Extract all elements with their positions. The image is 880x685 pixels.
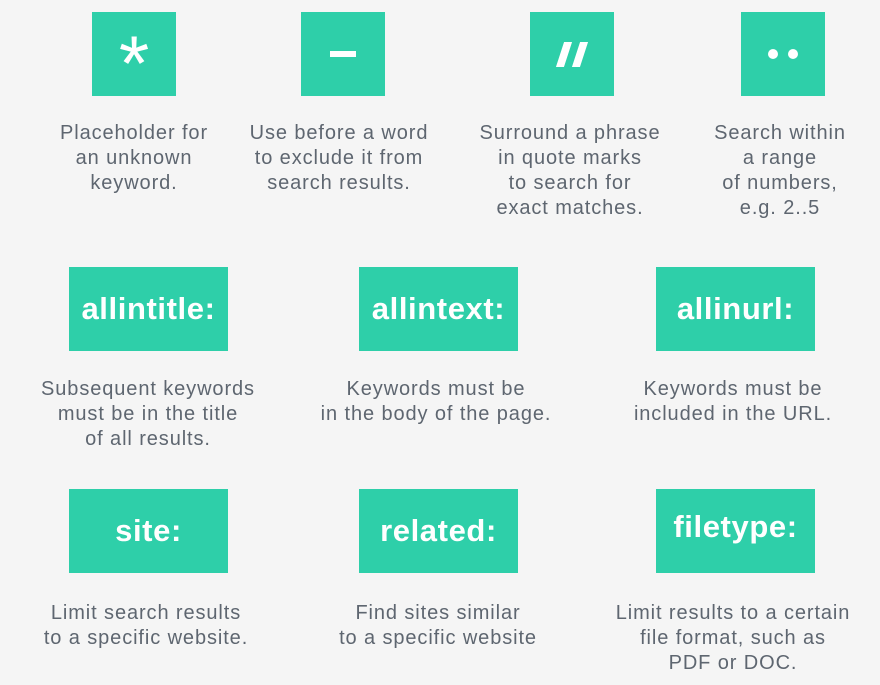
text: allintext (321, 378, 551, 425)
text: asterisk: Placeholder for (60, 122, 208, 144)
text: allinurl (634, 378, 832, 425)
box: related (359, 489, 518, 573)
box: allintitle (69, 267, 228, 351)
box: site: site: (115, 513, 182, 548)
text: related: to a specific website (339, 627, 537, 649)
text: related: Find sites similar (355, 602, 521, 624)
text: range: a range (743, 147, 817, 169)
icon: asterisk (92, 12, 176, 96)
text: allintitle: must be in the title (58, 403, 238, 425)
text: related (339, 602, 537, 649)
text: quotes: to search for (509, 172, 631, 194)
text: filetype: Limit results to a certain (616, 602, 850, 624)
text: range: e.g. 2..5 (740, 197, 820, 219)
text: site: Limit search results (51, 602, 241, 624)
text: site: to a specific website. (44, 627, 248, 649)
text: filetype: PDF or DOC. (669, 652, 797, 674)
icon: minus (301, 12, 385, 96)
text: filetype: file format, such as (640, 627, 826, 649)
text: minus: to exclude it from (255, 147, 423, 169)
text: allintitle (41, 378, 255, 450)
box: site (69, 489, 228, 573)
box: allinurl: allinurl: (677, 291, 794, 326)
icon: quotes (530, 12, 614, 96)
box: related: related: (380, 513, 497, 548)
text: asterisk: an unknown (76, 147, 192, 169)
text: quotes: exact matches. (496, 197, 644, 219)
text: allinurl: included in the URL. (634, 403, 832, 425)
text: allintitle: of all results. (85, 428, 211, 450)
box: filetype (656, 489, 815, 573)
box: allintext: allintext: (372, 291, 505, 326)
text: range: of numbers, (722, 172, 838, 194)
icon: range dots (741, 12, 825, 96)
text: quotes: Surround a phrase (480, 122, 660, 144)
box: filetype: filetype: (673, 509, 798, 544)
text: asterisk: keyword. (90, 172, 178, 194)
icon: asterisk: * (119, 18, 149, 106)
box: allinurl (656, 267, 815, 351)
text: range (714, 122, 846, 219)
text: allinurl: Keywords must be (644, 378, 822, 400)
text: allintitle: Subsequent keywords (41, 378, 255, 400)
text: minus (250, 122, 428, 194)
text: range: Search within (714, 122, 846, 144)
text: allintext: in the body of the page. (321, 403, 551, 425)
text: site (44, 602, 248, 649)
text: minus: Use before a word (250, 122, 428, 144)
text: asterisk (60, 122, 208, 194)
text: quotes (480, 122, 660, 219)
text: allintext: Keywords must be (347, 378, 525, 400)
box: allintext (359, 267, 518, 351)
text: filetype (616, 602, 850, 674)
text: quotes: in quote marks (498, 147, 642, 169)
text: minus: search results. (267, 172, 411, 194)
box: allintitle: allintitle: (81, 291, 216, 326)
